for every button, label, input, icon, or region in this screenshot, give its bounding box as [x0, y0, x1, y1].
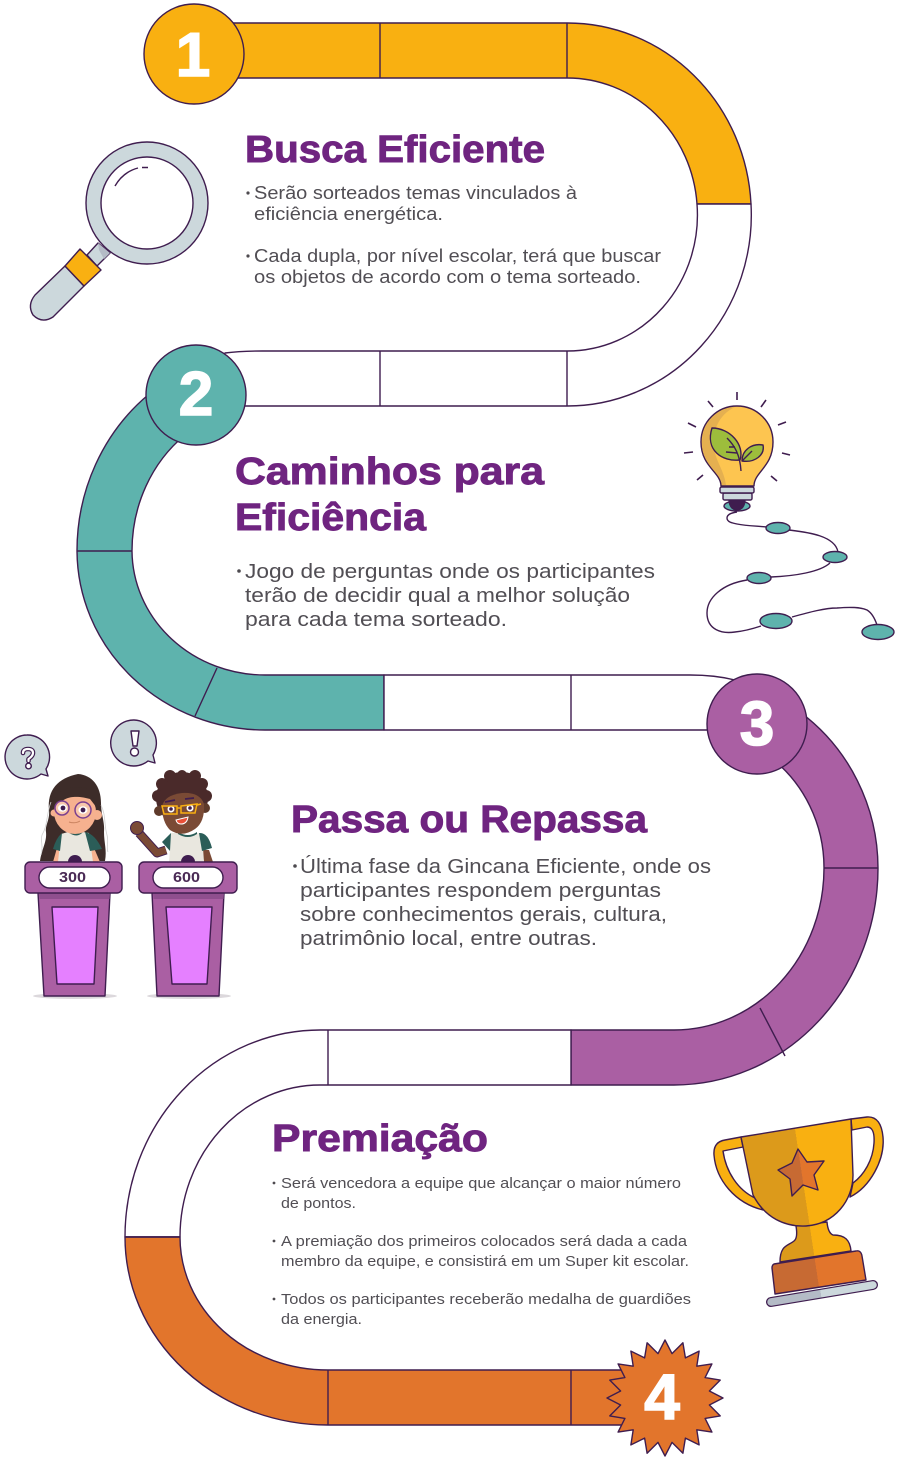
heading: Passa ou Repassa: Passa ou Repassa	[291, 799, 648, 841]
podium: score 600	[139, 862, 237, 999]
badge: number 2	[146, 345, 246, 445]
text block: Passa ou Repassa bullets	[293, 855, 711, 950]
text block: Passa ou Repassa bullets: participantes respondem perguntas	[300, 880, 661, 902]
text block: Caminhos bullets: Jogo de perguntas onde os participantes	[245, 561, 655, 583]
character: boy contestant	[130, 770, 213, 869]
heading: Caminhos para Eficiência	[235, 451, 545, 539]
text block: Premiação bullets: A premiação dos primeiros colocados será dada a cada	[281, 1233, 688, 1250]
badge: number 2: 2	[179, 360, 213, 429]
badge: number 1	[144, 4, 244, 104]
badge: number 3: 3	[740, 690, 774, 759]
ribbon segment 2: white return	[384, 675, 757, 730]
text block: Passa ou Repassa bullets: sobre conhecimentos gerais, cultura,	[300, 904, 667, 926]
icon: trophy	[714, 1117, 883, 1302]
icon: exclamation speech bubble	[111, 720, 156, 766]
text block: Caminhos bullets: terão de decidir qual a melhor solução	[245, 585, 630, 607]
text block: Premiação bullets	[273, 1175, 691, 1328]
character: girl contestant	[40, 774, 108, 869]
ribbon segment 3: purple	[571, 712, 878, 1085]
text block: Busca Eficiente bullets	[246, 183, 661, 287]
ribbon segment 4: orange	[125, 1237, 640, 1425]
text block: Passa ou Repassa bullets: Última fase da Gincana Eficiente, onde os	[300, 855, 711, 878]
ribbon segment 2: teal	[77, 395, 384, 730]
text block: Premiação bullets: da energia.	[281, 1311, 362, 1328]
icon: cord with teal stepping stones	[707, 512, 894, 640]
text block: Premiação bullets: Todos os participantes receberão medalha de guardiões	[281, 1291, 691, 1308]
ribbon segment 1: white return	[196, 204, 751, 406]
heading: Premiação: Premiação	[272, 1118, 488, 1160]
text block: Busca Eficiente bullets: Serão sorteados temas vinculados à	[254, 183, 578, 203]
heading: Caminhos para Eficiência: Eficiência	[235, 497, 427, 539]
text block: Premiação bullets: Será vencedora a equipe que alcançar o maior número	[281, 1175, 681, 1192]
podium: score 300	[25, 862, 122, 999]
ribbon segment 1: yellow	[194, 23, 751, 204]
text block: Passa ou Repassa bullets: patrimônio local, entre outras.	[300, 928, 597, 950]
text block: Caminhos bullets	[237, 561, 655, 631]
icon: magnifying glass	[30, 142, 208, 320]
text block: Premiação bullets: membro da equipe, e consistirá em um Super kit escolar.	[281, 1253, 689, 1270]
badge: number 4 starburst	[607, 1340, 723, 1456]
text block: Busca Eficiente bullets: Cada dupla, por nível escolar, terá que buscar	[254, 246, 661, 266]
icon: light bulb with leaves	[684, 392, 790, 511]
badge: number 3	[707, 674, 807, 774]
badge: number 1: 1	[176, 21, 210, 90]
heading: Busca Eficiente: Busca Eficiente	[245, 129, 545, 171]
heading: Caminhos para Eficiência: Caminhos para	[235, 451, 545, 493]
text block: Busca Eficiente bullets: os objetos de acordo com o tema sorteado.	[254, 267, 641, 287]
podium: score 600: 600	[173, 869, 200, 886]
badge: number 4 starburst: 4	[644, 1361, 680, 1433]
text block: Busca Eficiente bullets: eficiência energética.	[254, 204, 443, 224]
podium: score 300: 300	[59, 869, 86, 886]
text block: Caminhos bullets: para cada tema sorteado.	[245, 609, 507, 631]
icon: question speech bubble	[5, 735, 50, 779]
text block: Premiação bullets: de pontos.	[281, 1195, 356, 1212]
ribbon segment 3: white return	[125, 1030, 571, 1237]
